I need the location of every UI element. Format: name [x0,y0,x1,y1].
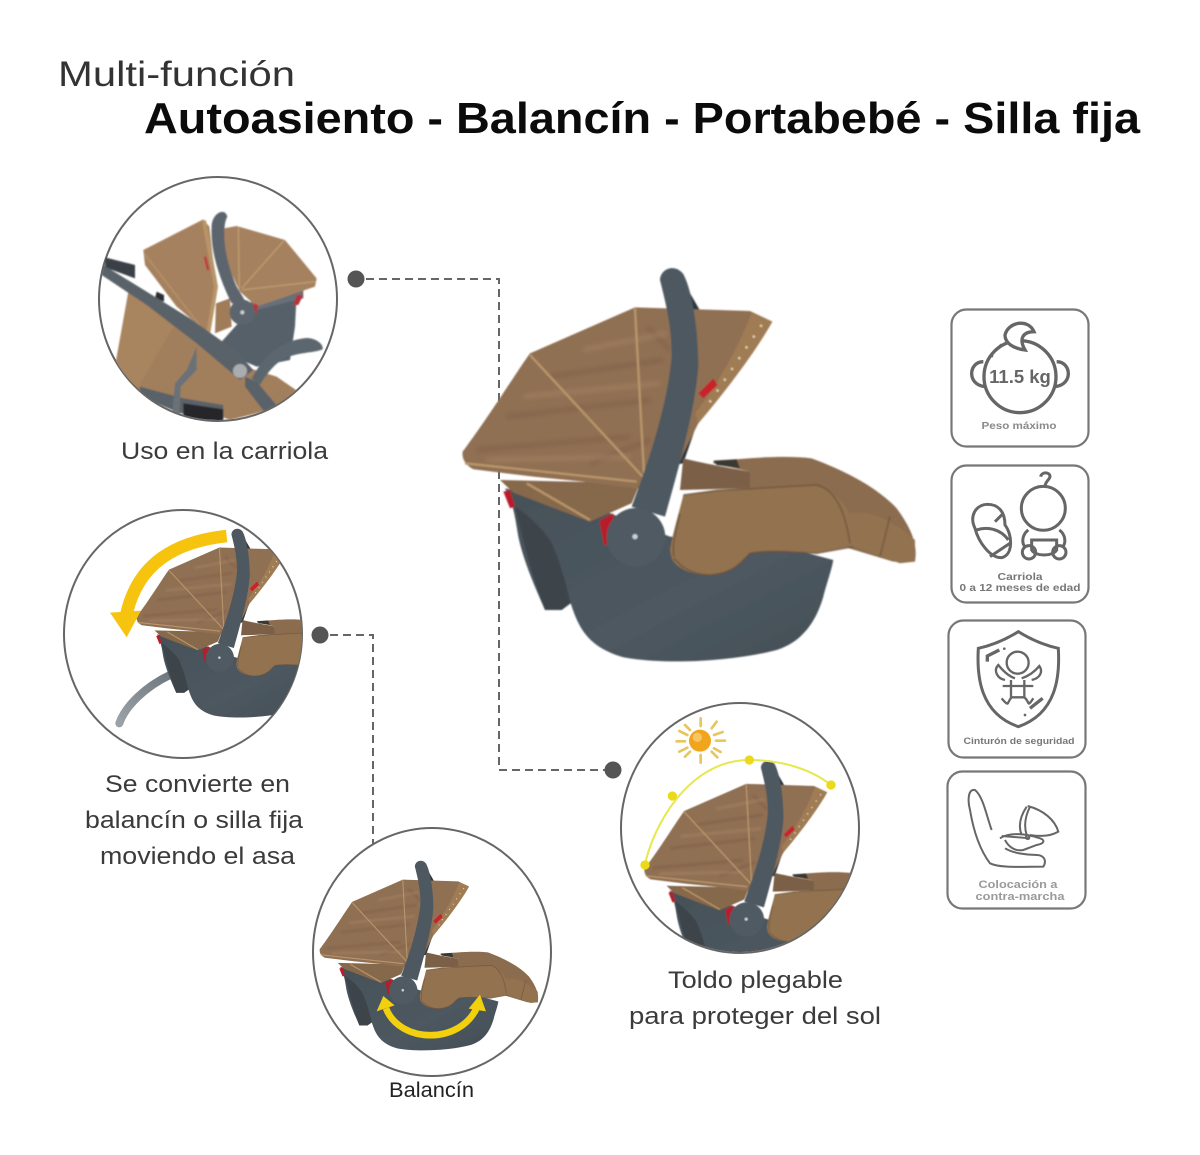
dashed connector: rocker [312,626,373,845]
label: rocker conversion: balancín o silla fija [85,807,304,834]
icon: car seat with rear-facing carrier [969,790,1058,867]
feature card: safety harness [948,620,1086,758]
feature card: rear-facing installation: Colocación a [978,879,1059,891]
feature card: age range [952,466,1088,602]
feature card: safety harness: Cinturón de seguridad [964,736,1075,747]
label: folding canopy [629,967,881,1030]
feature card: age range: Carriola [998,572,1043,583]
label: stroller use: Uso en la carriola [121,438,329,465]
label: rocker conversion: moviendo el asa [100,843,296,870]
canopy seat illustration [644,760,851,952]
feature card: maximum weight: Peso máximo [982,421,1056,432]
feature card: age range: 0 a 12 meses de edad [960,583,1080,594]
label: folding canopy: para proteger del sol [629,1003,881,1030]
label: rocker conversion [85,771,304,870]
feature card: rear-facing installation: contra-marcha [976,891,1066,903]
icon: swaddled baby and hanging baby [973,473,1066,559]
main product photo: infant car seat [462,268,916,661]
stroller illustration [102,212,323,423]
panel: rocking mode [313,828,551,1076]
label: Balancín: Balancín [389,1079,474,1102]
dashed connector: stroller to canopy [348,270,622,778]
panel: stroller use [99,177,337,423]
label: rocker conversion: Se convierte en [105,771,290,798]
feature card: maximum weight: 11.5 kg [989,366,1051,387]
panel: rocker conversion [63,509,303,759]
rocker illustration [110,528,302,728]
label: folding canopy: Toldo plegable [668,967,843,994]
icon: yellow rotation arrow [110,536,227,637]
icon: sun and canopy arc [640,718,836,870]
icon: shield with baby in harness [978,632,1059,727]
icon: baby head with weight [972,323,1068,413]
feature card: maximum weight [952,310,1088,446]
title: product modes: Autoasiento - Balancín - Portabebé - Silla fija [144,94,1141,143]
feature card: rear-facing installation [948,772,1086,908]
icon: yellow rocking arrow [377,995,486,1035]
rocking seat illustration [320,861,538,1050]
panel: folding canopy [620,702,860,954]
title: Multi-función: Multi-función [58,55,295,94]
